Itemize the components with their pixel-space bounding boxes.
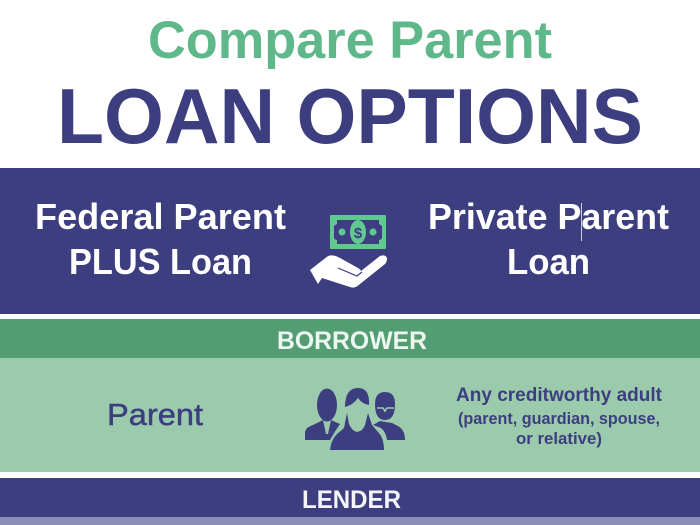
title: Compare Parent <box>148 11 552 70</box>
text: private borrower <box>456 385 663 448</box>
heading: federal loan <box>35 196 286 282</box>
section heading: lender: LENDER <box>302 486 401 514</box>
panel: loan types header <box>0 168 700 314</box>
heading: federal loan: PLUS Loan <box>69 241 252 282</box>
icon: money in hand: $ <box>354 225 363 242</box>
text: private borrower: or relative) <box>516 429 602 448</box>
panel: borrower comparison <box>0 358 700 472</box>
section heading: lender <box>0 478 700 517</box>
section heading: borrower <box>0 319 700 358</box>
heading: federal loan: Federal Parent <box>35 196 286 237</box>
title: LOAN OPTIONS <box>57 72 643 160</box>
text: private borrower: Any creditworthy adult <box>456 385 663 406</box>
title <box>57 11 643 160</box>
heading: private loan: Private Parent <box>428 196 669 237</box>
text: private borrower: (parent, guardian, spouse, <box>458 409 660 428</box>
heading: private loan: Loan <box>507 241 590 282</box>
heading: private loan <box>428 196 669 282</box>
icon: money in hand <box>310 215 387 288</box>
panel: lender comparison (cropped) <box>0 517 700 525</box>
section heading: borrower: BORROWER <box>277 327 427 355</box>
icon: people <box>305 388 405 450</box>
text: federal borrower: Parent <box>107 397 203 432</box>
